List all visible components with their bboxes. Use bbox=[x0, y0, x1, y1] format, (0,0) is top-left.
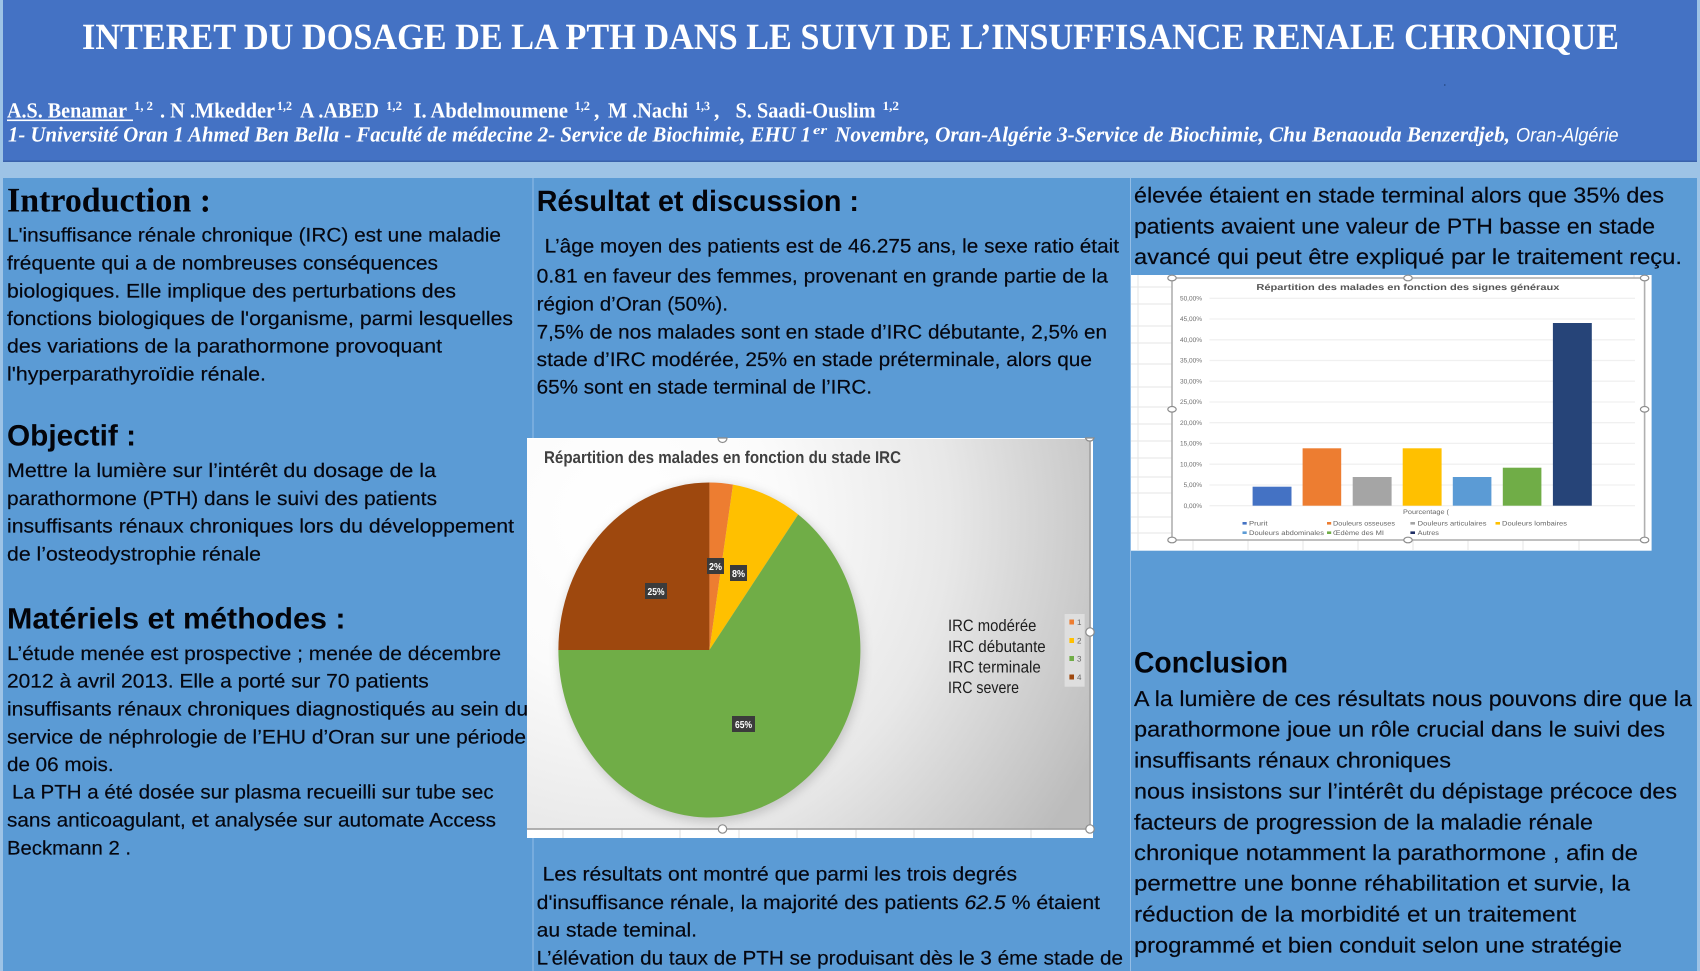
text: objectif: parathormone (PTH) dans le suivi des patients bbox=[7, 488, 437, 510]
gridlines and y axis: 5,00% bbox=[1184, 482, 1202, 489]
authors: , bbox=[594, 98, 599, 122]
affiliations bbox=[8, 123, 1619, 147]
heading: objectif: Objectif : bbox=[7, 420, 136, 453]
authors: 1,2 bbox=[574, 99, 590, 113]
data label: 2% bbox=[707, 558, 724, 574]
text: objectif: de l’osteodystrophie rénale bbox=[7, 543, 261, 565]
chart frame bbox=[1172, 278, 1645, 540]
authors: 1, 2 bbox=[134, 99, 153, 113]
text: conclusion: parathormone joue un rôle crucial dans le suivi des bbox=[1134, 717, 1665, 742]
text: résultats suite: d'insuffisance rénale, la majorité des patients 62.5 % étaient bbox=[537, 892, 1101, 914]
authors: , bbox=[714, 98, 719, 122]
authors: I. Abdelmoumene bbox=[414, 98, 568, 122]
legend: Douleurs articulaires bbox=[1418, 521, 1487, 528]
text: suite discussion: patients avaient une valeur de PTH basse en stade bbox=[1134, 213, 1655, 238]
affiliations: Oran-Algérie bbox=[1516, 125, 1619, 147]
text: résultats: L’âge moyen des patients est de 46.275 ans, le sexe ratio était bbox=[545, 235, 1120, 257]
legend names: IRC modérée bbox=[948, 617, 1036, 635]
legend bbox=[1242, 521, 1568, 537]
text: matériels et méthodes: Beckmann 2 . bbox=[7, 837, 131, 859]
text: introduction bbox=[7, 225, 513, 385]
gridlines and y axis: 30,00% bbox=[1180, 378, 1202, 385]
text: résultats bbox=[537, 235, 1120, 399]
text: objectif bbox=[7, 460, 515, 565]
legend: Douleurs osseuses bbox=[1333, 521, 1396, 528]
chart title: Répartition des malades en fonction du stade IRC bbox=[544, 448, 901, 467]
chart title: Répartition des malades en fonction des signes généraux bbox=[1256, 282, 1560, 292]
authors: 1,2 bbox=[882, 99, 899, 113]
heading: introduction: Introduction : bbox=[7, 182, 211, 220]
authors: A .ABED bbox=[300, 98, 379, 122]
legend names bbox=[948, 617, 1046, 697]
legend names: IRC severe bbox=[948, 679, 1019, 697]
text: suite discussion: avancé qui peut être expliqué par le traitement reçu. bbox=[1134, 244, 1682, 269]
axis label: Pourcentage ( bbox=[1403, 509, 1450, 516]
heading: conclusion: Conclusion bbox=[1134, 647, 1288, 680]
data label: 8% bbox=[730, 565, 747, 581]
legend keys bbox=[1065, 614, 1085, 687]
authors: M .Nachi bbox=[608, 98, 688, 122]
text: conclusion: permettre une bonne réhabilitation et survie, la bbox=[1134, 871, 1631, 896]
text: introduction: fonctions biologiques de l'organisme, parmi lesquelles bbox=[7, 308, 513, 330]
text: matériels et méthodes: La PTH a été dosée sur plasma recueilli sur tube sec bbox=[12, 782, 494, 804]
text: conclusion bbox=[1134, 686, 1693, 957]
text: conclusion: chronique notamment la parathormone , afin de bbox=[1134, 840, 1638, 865]
legend keys: 2 bbox=[1077, 636, 1082, 646]
text: matériels et méthodes bbox=[7, 643, 528, 859]
text: matériels et méthodes: sans anticoagulant, et analysée sur automate Access bbox=[7, 810, 496, 832]
authors: 1,2 bbox=[277, 99, 292, 113]
title: INTERET DU DOSAGE DE LA PTH DANS LE SUIVI DE L’INSUFFISANCE RENALE CHRONIQUE bbox=[82, 17, 1619, 58]
gridlines and y axis: 0,00% bbox=[1184, 503, 1202, 510]
affiliations: Novembre, Oran-Algérie 3-Service de Biochimie, Chu Benaouda Benzerdjeb, bbox=[834, 123, 1510, 147]
text: conclusion: insuffisants rénaux chroniques bbox=[1134, 748, 1451, 773]
chart: pie, répartition selon le stade IRC bbox=[527, 438, 1094, 838]
authors: 1,2 bbox=[386, 99, 402, 113]
legend names: IRC terminale bbox=[948, 659, 1041, 677]
gridlines and y axis: 35,00% bbox=[1180, 358, 1202, 365]
authors: 1,3 bbox=[695, 99, 710, 113]
legend keys: 3 bbox=[1077, 654, 1082, 664]
text: objectif: insuffisants rénaux chroniques lors du développement bbox=[7, 516, 515, 538]
text: résultats: 65% sont en stade terminal de l’IRC. bbox=[537, 377, 872, 399]
panel: left column bbox=[7, 182, 528, 859]
text: conclusion: facteurs de progression de la maladie rénale bbox=[1134, 809, 1593, 834]
panel: middle column bbox=[537, 185, 1123, 969]
data label: 8%: 8% bbox=[732, 569, 745, 580]
header banner bbox=[3, 0, 1697, 162]
legend: Prurit bbox=[1249, 521, 1268, 528]
heading: matériels et méthodes: Matériels et méthodes : bbox=[7, 602, 346, 635]
text: résultats suite: Les résultats ont montré que parmi les trois degrés bbox=[543, 864, 1017, 886]
text: résultats suite: au stade teminal. bbox=[537, 920, 697, 942]
data label: 25% bbox=[645, 583, 667, 599]
text: résultats: région d’Oran (50%). bbox=[537, 293, 728, 315]
text: introduction: L'insuffisance rénale chronique (IRC) est une maladie bbox=[7, 225, 501, 247]
panel: right column bbox=[1134, 183, 1693, 957]
gridlines and y axis: 50,00% bbox=[1180, 296, 1202, 302]
text: résultats: stade d’IRC modérée, 25% en stade préterminale, alors que bbox=[537, 349, 1092, 371]
gridlines and y axis: 25,00% bbox=[1180, 399, 1202, 406]
text: introduction: des variations de la parathormone provoquant bbox=[7, 336, 443, 358]
data label: 2%: 2% bbox=[709, 562, 722, 573]
text: introduction: l'hyperparathyroïdie rénale. bbox=[7, 363, 266, 385]
gridlines and y axis: 15,00% bbox=[1180, 441, 1202, 448]
text: conclusion: nous insistons sur l’intérêt du dépistage précoce des bbox=[1134, 778, 1677, 803]
text: conclusion: A la lumière de ces résultats nous pouvons dire que la bbox=[1134, 686, 1693, 711]
data label: 65% bbox=[732, 716, 755, 732]
authors: S. Saadi-Ouslim bbox=[736, 98, 876, 122]
text: matériels et méthodes: 2012 à avril 2013. Elle a porté sur 70 patients bbox=[7, 671, 429, 693]
chart: barres, répartition selon les signes généraux bbox=[1131, 275, 1652, 551]
text: suite discussion: élevée étaient en stade terminal alors que 35% des bbox=[1134, 183, 1664, 208]
text: résultats suite bbox=[537, 864, 1123, 969]
text: objectif: Mettre la lumière sur l’intérêt du dosage de la bbox=[7, 460, 436, 482]
affiliations: er bbox=[813, 123, 827, 137]
text: résultats: 7,5% de nos malades sont en stade d’IRC débutante, 2,5% en bbox=[537, 321, 1107, 343]
gridlines and y axis: 20,00% bbox=[1180, 420, 1202, 427]
affiliations: 1- Université Oran 1 Ahmed Ben Bella - Faculté de médecine 2- Service de Biochimie, EHU 1 bbox=[8, 123, 811, 147]
text: introduction: biologiques. Elle implique des perturbations des bbox=[7, 280, 456, 302]
text: matériels et méthodes: de 06 mois. bbox=[7, 754, 114, 776]
selection handles bbox=[1168, 275, 1649, 543]
legend: Douleurs abdominales bbox=[1249, 530, 1325, 537]
gridlines and y axis: 45,00% bbox=[1180, 316, 1202, 323]
authors: A.S. Benamar bbox=[7, 98, 127, 122]
data label: 65%: 65% bbox=[735, 720, 752, 731]
text: résultats: 0.81 en faveur des femmes, provenant en grande partie de la bbox=[537, 266, 1108, 288]
selection handles bbox=[718, 438, 1094, 833]
text: introduction: fréquente qui a de nombreuses conséquences bbox=[7, 252, 438, 274]
text: conclusion: réduction de la morbidité et un traitement bbox=[1134, 902, 1576, 927]
authors bbox=[7, 98, 899, 122]
legend keys: 1 bbox=[1077, 618, 1082, 627]
text: matériels et méthodes: insuffisants rénaux chroniques diagnostiqués au sein du bbox=[7, 699, 528, 721]
bars bbox=[1253, 323, 1592, 506]
text: résultats suite: L’élévation du taux de PTH se produisant dès le 3 éme stade de bbox=[537, 947, 1123, 969]
data label: 25%: 25% bbox=[648, 587, 665, 598]
text: conclusion: programmé et bien conduit selon une stratégie bbox=[1134, 932, 1622, 957]
text: matériels et méthodes: service de néphrologie de l’EHU d’Oran sur une période bbox=[7, 726, 526, 748]
legend: Douleurs lombaires bbox=[1502, 521, 1568, 528]
gridlines and y axis bbox=[1180, 296, 1635, 510]
pie slices bbox=[558, 482, 860, 817]
heading: résultat et discussion: Résultat et discussion : bbox=[537, 185, 859, 218]
gridlines and y axis: 40,00% bbox=[1180, 337, 1202, 344]
gridlines and y axis: 10,00% bbox=[1180, 461, 1202, 468]
authors: . N .Mkedder bbox=[160, 98, 275, 122]
legend keys: 4 bbox=[1077, 673, 1082, 682]
legend names: IRC débutante bbox=[948, 638, 1046, 656]
legend: Autres bbox=[1418, 530, 1440, 537]
text: matériels et méthodes: L’étude menée est prospective ; menée de décembre bbox=[7, 643, 501, 665]
legend: Œdème des MI bbox=[1333, 530, 1384, 537]
text: suite discussion bbox=[1134, 183, 1682, 269]
